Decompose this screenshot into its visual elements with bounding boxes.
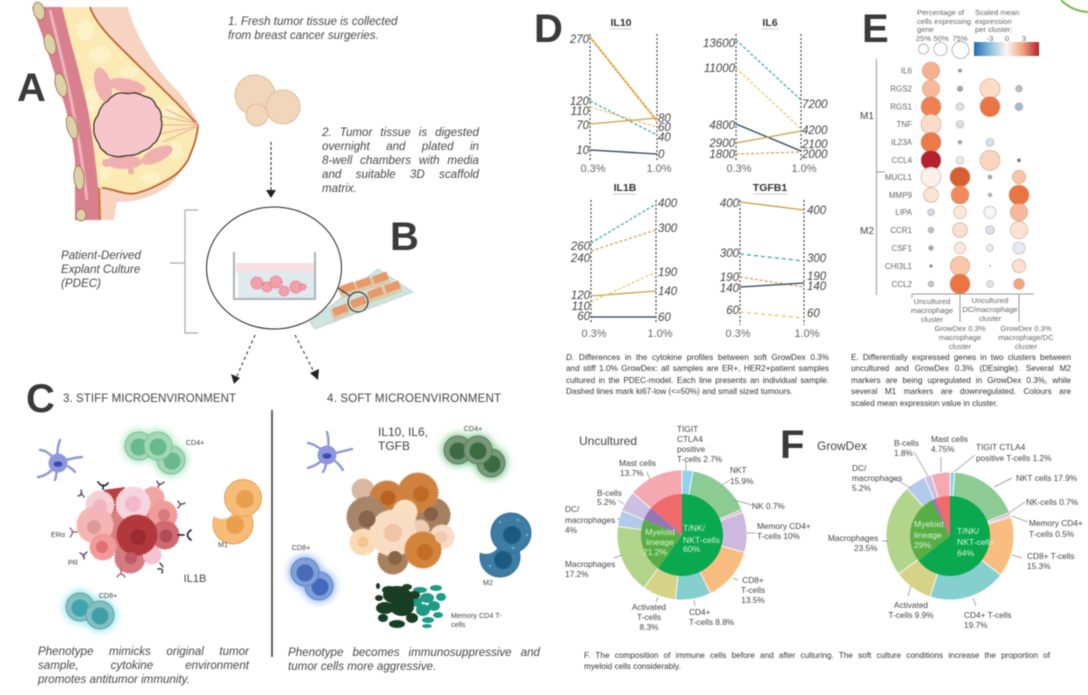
labels: uncultured donut: T-cells 8.8% — [689, 617, 735, 627]
labels: uncultured donut: NK 0.7% — [752, 501, 785, 511]
labels: GrowDex donut: CD8+ T-cells — [1027, 551, 1075, 561]
chart: IL6: 13600 — [703, 38, 736, 50]
chart: TGFB1: 300 — [720, 248, 740, 260]
labels: uncultured donut: Macrophages — [565, 559, 615, 569]
chart: IL10: 60 — [658, 122, 671, 134]
labels: uncultured donut: 13.5% — [741, 595, 765, 605]
caption E: scaled mean expression value in cluster. — [851, 399, 998, 408]
chart: IL1B — [570, 182, 678, 340]
labels: uncultured donut: CD4+ — [689, 607, 710, 617]
chart: IL10: 1.0% — [646, 163, 672, 175]
chart: IL10: 80 — [658, 113, 671, 125]
text: step 2: overnight and plated in — [322, 140, 479, 153]
panel letter A: A — [17, 66, 46, 110]
chart: IL10: 120 — [570, 96, 590, 108]
label: cytokines soft: IL10, IL6, — [378, 425, 428, 439]
text: step 1: from breast cancer surgeries. — [228, 29, 379, 42]
legend: colour scale: 3 — [1022, 34, 1026, 43]
chart: IL10 — [569, 17, 672, 175]
legend: dot size: 75% — [952, 34, 968, 43]
legend: dot size: gene — [917, 25, 934, 34]
panel letter B: B — [390, 215, 419, 259]
labels: uncultured donut: Memory CD4+ — [757, 521, 811, 531]
icon: dendritic cell (stiff) — [38, 440, 82, 480]
caption D — [566, 353, 830, 396]
labels: GrowDex donut: lineage — [914, 530, 942, 540]
icon: M1 macrophage — [209, 480, 262, 544]
labels: GrowDex donut: 1.8% — [894, 448, 914, 458]
heading: stiff: 3. STIFF MICROENVIRONMENT — [63, 393, 236, 405]
text: soft phenotype — [288, 646, 541, 674]
label: ER alpha: ERα — [51, 530, 65, 539]
chart: TGFB1: 190 — [807, 271, 827, 283]
chart: IL6: IL6 — [762, 17, 778, 29]
chart: IL1B: IL1B — [614, 182, 637, 194]
chart: dot plot: GrowDex 0.3% — [1000, 324, 1052, 333]
labels: uncultured donut: T-cells 2.7% — [677, 454, 723, 464]
legend: colour scale: -3 — [987, 34, 993, 43]
chart: TGFB1: 60 — [807, 308, 820, 320]
labels: GrowDex donut: Memory CD4+ — [1029, 518, 1083, 528]
caption D: D. Differences in the cytokine profiles between soft GrowDex 0.3% — [566, 353, 829, 362]
icon: dendritic cell (soft) — [308, 432, 352, 472]
caption F — [584, 651, 1051, 672]
chart: dot plot: CHI3L1 — [885, 262, 913, 271]
icon: memory CD4 T cells — [375, 583, 446, 628]
chart: IL6: 11000 — [704, 63, 736, 75]
icon: CD8+ T cells (stiff) — [64, 591, 116, 631]
chart: IL1B: 1.0% — [647, 328, 673, 340]
chart: TGFB1: TGFB1 — [753, 182, 787, 194]
label: M1: M1 — [218, 540, 228, 549]
caption F: F. The composition of immune cells before and after culturing. The soft culture conditions increase the proportion of — [584, 651, 1050, 660]
label: PR: PR — [68, 558, 78, 567]
legend: dot size: 25% — [916, 34, 931, 43]
panel letter E: E — [862, 7, 889, 51]
labels: uncultured donut: T-cells — [637, 612, 661, 622]
bracket: PDEC — [170, 210, 198, 333]
chart: dot plot: cluster — [949, 342, 972, 351]
labels: GrowDex donut: TIGIT CTLA4 — [976, 442, 1025, 452]
chart: dot plot: GrowDex 0.3% — [934, 324, 986, 333]
chart: TGFB1: 400 — [720, 198, 740, 210]
labels: uncultured donut: 17.2% — [565, 569, 589, 579]
chart: IL10: 0 — [658, 149, 665, 161]
chart: TGFB1: 0.3% — [725, 328, 751, 340]
labels: uncultured donut — [565, 424, 811, 632]
decorative green arc — [1061, 0, 1088, 12]
caption D: Dashed lines mark ki67-low (<=50%) and small sized tumours. — [566, 387, 793, 396]
chart: TGFB1: 140 — [720, 283, 740, 295]
legend: colour scale: 0 — [1005, 34, 1009, 43]
icon: tumor cluster (soft) — [347, 473, 454, 574]
text: soft phenotype: tumor cells more aggressive. — [288, 660, 436, 673]
labels: uncultured donut: Myeloid — [645, 527, 675, 537]
chart: TGFB1: 400 — [807, 205, 827, 217]
chart: IL6: 4200 — [802, 125, 828, 137]
chart: TGFB1: 300 — [807, 253, 827, 265]
labels: uncultured donut: NKT — [730, 465, 747, 475]
chart: dot plot: IL6 — [901, 66, 913, 76]
labels: uncultured donut: B-cells — [597, 488, 622, 498]
legend: dot size: Percentage of — [917, 8, 965, 17]
caption D: and stiff 1.0% GrowDex: all samples are ER+, HER2+patient samples — [566, 364, 829, 373]
chart: GrowDex donut — [886, 472, 1014, 600]
chart: IL10: 70 — [576, 120, 590, 132]
legend: colour scale: expression — [975, 17, 1012, 26]
chart: dot plot: CCR1 — [890, 226, 913, 235]
caption E: markers are being upregulated in GrowDex 0.3%, while — [851, 376, 1071, 385]
chart: IL1B: 190 — [658, 267, 678, 279]
labels: GrowDex donut: 64% — [957, 548, 975, 558]
chart: uncultured donut — [617, 470, 747, 600]
chart: dot plot: cluster — [979, 314, 1002, 323]
panel letter F: F — [780, 423, 804, 467]
chart: IL10: 10 — [576, 145, 590, 157]
chart: dot plot — [860, 59, 1054, 351]
chart: IL6 — [703, 17, 828, 175]
caption D: cultured in the PDEC-model. Each line presents an individual sample. — [566, 376, 829, 385]
text: stiff phenotype: sample, cytokine environment — [38, 659, 249, 672]
label: cytokines soft: TGFB — [378, 439, 410, 453]
text: step 2: 2. Tumor tissue is digested — [322, 126, 479, 139]
label: memory CD4: cells — [451, 620, 466, 629]
chart: IL10: IL10 — [610, 17, 632, 29]
icon: CD4+ T cells (stiff) — [123, 430, 187, 476]
icon: ER+ tumor cluster (stiff) — [70, 481, 191, 577]
legend: dot size: cells expressing — [917, 17, 971, 26]
text: step 2: matrix. — [322, 182, 357, 195]
labels: uncultured donut: 60% — [683, 544, 701, 554]
chart: dot plot: M1 — [860, 111, 874, 122]
illustration: breast cross-section with tumor — [31, 1, 199, 221]
labels: uncultured donut: T-cells — [741, 585, 765, 595]
chart: IL1B: 240 — [570, 253, 591, 265]
panel letter C: C — [26, 377, 55, 421]
chart: dot plot: Uncultured — [972, 296, 1008, 305]
text: step 2 — [321, 126, 480, 195]
chart: IL10: 110 — [571, 106, 590, 118]
labels: GrowDex donut: DC/ — [852, 463, 866, 473]
legend: colour scale: Scaled mean — [975, 8, 1019, 17]
labels: uncultured donut: T-cells 10% — [757, 531, 801, 541]
text: stiff phenotype — [37, 645, 250, 686]
label: M2: M2 — [483, 578, 493, 587]
label: CD8+ stiff: CD8+ — [99, 591, 117, 600]
chart: IL6: 2100 — [801, 139, 828, 151]
chart: dot plot: macrophage/DC — [998, 333, 1054, 342]
labels: uncultured donut: 5.2% — [597, 497, 617, 507]
icon: tumor tissue fragments — [235, 75, 300, 126]
labels: GrowDex donut: T/NK/ — [957, 526, 979, 536]
labels: GrowDex donut: T-cells 0.5% — [1029, 529, 1075, 539]
labels: GrowDex donut: NKT-cells — [957, 537, 994, 547]
heading: GrowDex: GrowDex — [817, 439, 867, 453]
labels: uncultured donut: TIGIT — [677, 424, 698, 434]
chart: IL1B: 300 — [658, 223, 678, 235]
labels: GrowDex donut: NK-cells 0.7% — [1026, 497, 1079, 507]
chart: IL6: 4800 — [709, 120, 736, 132]
labels: uncultured donut: Mast cells — [619, 458, 656, 468]
chart: IL1B: 140 — [658, 286, 678, 298]
labels: GrowDex donut: B-cells — [894, 438, 919, 448]
labels: uncultured donut: Activated — [632, 602, 666, 612]
chart: dot plot: cluster — [1015, 342, 1038, 351]
text: step 2: and suitable 3D scaffold — [322, 168, 479, 181]
chart: IL1B: 60 — [658, 312, 671, 324]
chart: TGFB1: 60 — [726, 305, 740, 317]
chart: dot plot: CCL2 — [892, 280, 913, 289]
chart: IL6: 7200 — [802, 99, 828, 111]
heading: soft: 4. SOFT MICROENVIRONMENT — [327, 393, 501, 405]
chart: dot plot: MMP9 — [889, 191, 913, 200]
chart: dot plot: TNF — [896, 120, 912, 129]
chart: TGFB1: 140 — [807, 281, 827, 293]
chart: IL1B: 260 — [570, 241, 591, 253]
labels: GrowDex donut: Activated — [894, 600, 928, 610]
label: CD4+ stiff: CD4+ — [186, 438, 204, 447]
text: soft phenotype: Phenotype becomes immunosuppressive and — [288, 646, 540, 659]
arrow: to stiff microenvironment — [231, 335, 255, 384]
labels: GrowDex donut: 23.5% — [854, 543, 878, 553]
chart: dot plot: CSF1 — [892, 244, 913, 253]
label: CD4+ soft: CD4+ — [464, 424, 482, 433]
caption E: several M1 markers are downregulated. Colours are — [851, 387, 1071, 396]
callout circle with culture well — [206, 207, 368, 329]
labels: uncultured donut: T/NK/ — [683, 523, 705, 533]
chart: IL1B: 110 — [572, 301, 591, 313]
labels: uncultured donut: CTLA4 — [677, 434, 703, 444]
icon: M2 macrophage — [472, 513, 531, 577]
labels: uncultured donut: DC/ — [565, 504, 579, 514]
chart: dot plot: M2 — [860, 226, 874, 237]
chart: IL6: 2000 — [801, 149, 828, 161]
labels: GrowDex donut: positive T-cells 1.2% — [976, 453, 1052, 463]
labels: uncultured donut: lineage — [646, 537, 674, 547]
legend: dot size — [916, 8, 971, 58]
chart: IL6: 1.0% — [791, 163, 817, 175]
legend: dot size: 50% — [933, 34, 949, 43]
chart: IL6: 0.3% — [726, 163, 752, 175]
chart: IL10: 40 — [658, 132, 671, 144]
heading: Uncultured: Uncultured — [579, 434, 637, 448]
divider — [271, 410, 273, 657]
chart: dot plot: RGS1 — [890, 102, 913, 112]
caption E — [850, 353, 1072, 408]
labels: GrowDex donut — [828, 434, 1083, 630]
chart: dot plot: CCL4 — [892, 156, 913, 165]
labels: GrowDex donut: T-cells 9.9% — [888, 610, 934, 620]
icon: CD8+ T cells (soft) — [289, 556, 335, 602]
labels: uncultured donut: macrophages — [565, 515, 615, 525]
text: PDEC label: Explant Culture — [61, 263, 140, 276]
chart: dot plot: cluster — [921, 315, 944, 324]
text: stiff phenotype: promotes antitumor immunity. — [38, 673, 190, 686]
labels: GrowDex donut: CD4+ T-cells — [964, 610, 1012, 620]
labels: GrowDex donut: Macrophages — [828, 533, 878, 543]
chart: IL1B: 400 — [658, 198, 678, 210]
labels: uncultured donut: CD8+ — [742, 575, 764, 585]
labels: uncultured donut: 15.9% — [730, 476, 754, 486]
label: IL1B: IL1B — [184, 573, 206, 585]
chart: IL6: 2900 — [708, 138, 736, 150]
caption E: uncultured and GrowDex 0.3% (DEsingle). Several M2 — [851, 364, 1071, 373]
legend: colour scale: per cluster: — [975, 25, 1013, 34]
labels: GrowDex donut: 4.75% — [931, 444, 955, 454]
label: memory CD4: Memory CD4 T- — [451, 611, 502, 620]
caption F: myeloid cells considerably. — [584, 662, 681, 671]
labels: GrowDex donut: 15.3% — [1027, 561, 1051, 571]
text: step 1 — [228, 15, 398, 42]
chart: IL10: 270 — [569, 34, 590, 46]
chart: dot plot: DC/macrophage — [962, 305, 1018, 314]
chart: IL1B: 120 — [571, 290, 591, 302]
labels: uncultured donut: positive — [677, 444, 706, 454]
caption E: E. Differentially expressed genes in two clusters between — [851, 353, 1071, 362]
arrow: to soft microenvironment — [295, 335, 319, 380]
chart: IL1B: 60 — [577, 311, 591, 323]
labels: uncultured donut: 8.3% — [640, 622, 659, 632]
labels: GrowDex donut: macrophages — [852, 473, 902, 483]
text: step 1: 1. Fresh tumor tissue is collected — [228, 15, 397, 28]
chart: dot plot: IL23A — [891, 138, 913, 147]
text: stiff phenotype: Phenotype mimicks original tumor — [38, 645, 249, 658]
labels: GrowDex donut: 19.7% — [964, 620, 988, 630]
legend: colour scale — [974, 8, 1039, 56]
chart: TGFB1: 190 — [720, 272, 740, 284]
labels: uncultured donut: 4% — [565, 525, 578, 535]
chart: IL6: 1800 — [709, 149, 736, 161]
icon: CD4+ T cells (soft) — [442, 434, 507, 479]
chart: dot plot: macrophage — [939, 333, 981, 342]
text: PDEC label: Patient-Derived — [61, 249, 141, 262]
chart: dot plot: LIPA — [895, 208, 913, 217]
labels: GrowDex donut: NKT cells 17.9% — [1016, 473, 1078, 483]
icon: chamber slide plate — [310, 269, 413, 329]
text: step 2: 8-well chambers with media — [322, 154, 479, 167]
labels: GrowDex donut: Mast cells — [931, 434, 968, 444]
chart: TGFB1: 1.0% — [794, 328, 820, 340]
panel letter D: D — [534, 7, 563, 51]
chart: dot plot: RGS2 — [890, 84, 913, 94]
chart: dot plot: macrophage — [911, 306, 953, 315]
labels: uncultured donut: 13.7% — [620, 468, 644, 478]
label: CD8+ soft: CD8+ — [292, 543, 310, 552]
labels: uncultured donut: 21.2% — [643, 547, 668, 557]
labels: uncultured donut: NKT-cells — [683, 535, 720, 545]
labels: GrowDex donut: 5.2% — [852, 483, 872, 493]
chart: dot plot: Uncultured — [914, 297, 950, 306]
chart: IL1B: 0.3% — [581, 328, 607, 340]
text: PDEC label — [60, 249, 142, 290]
text: PDEC label: (PDEC) — [61, 277, 101, 290]
chart: IL10: 0.3% — [580, 163, 606, 175]
chart: TGFB1 — [720, 182, 827, 340]
labels: GrowDex donut: Myeloid — [914, 519, 944, 529]
chart: dot plot: MUCL1 — [885, 173, 913, 182]
arrow: tissue to culture — [266, 142, 276, 198]
labels: GrowDex donut: 29% — [914, 540, 932, 550]
